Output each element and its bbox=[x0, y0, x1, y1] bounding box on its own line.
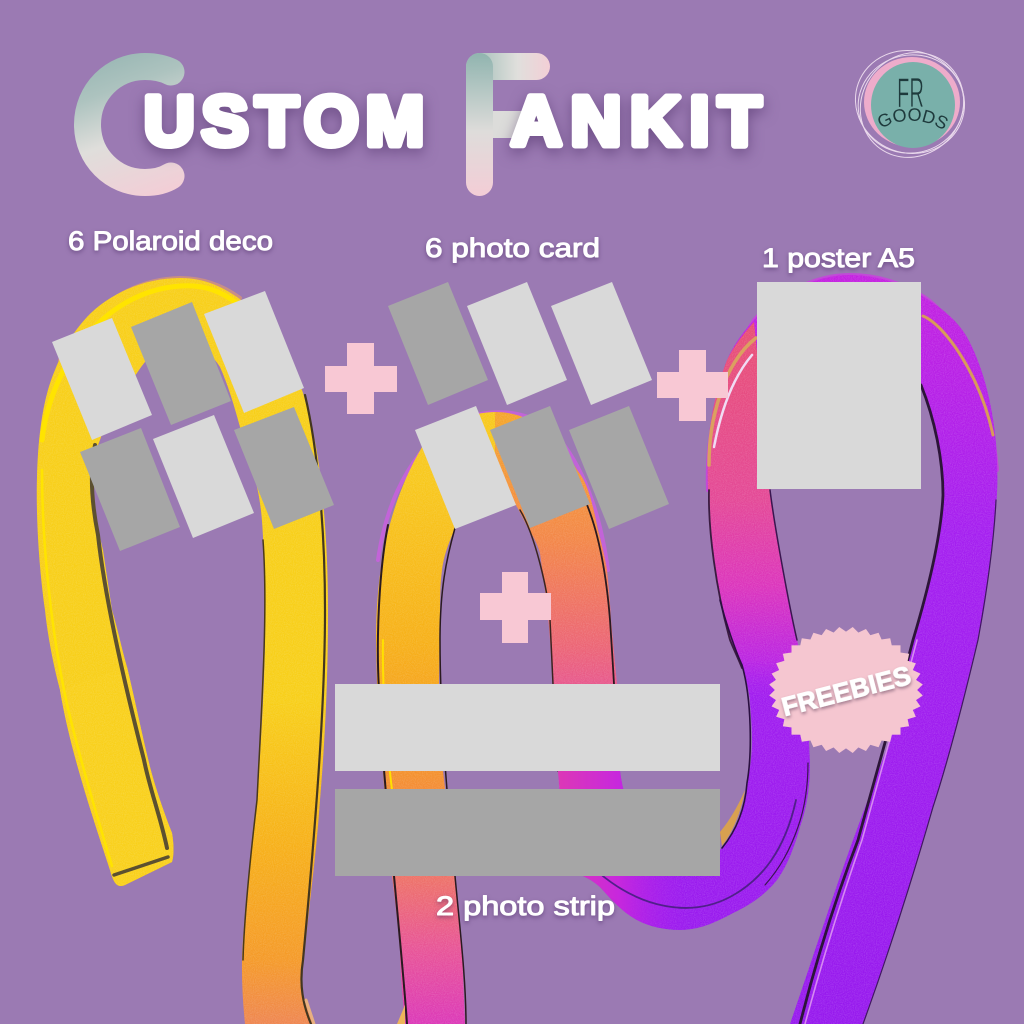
poster A5 placeholder bbox=[757, 282, 921, 489]
purple ribbon, loop and right arch bbox=[558, 275, 997, 1024]
decorative letter F bbox=[466, 53, 550, 196]
title: Custom Fankit bbox=[88, 53, 761, 196]
logo teal circle bbox=[871, 62, 955, 148]
label: 1 poster A5: 1 poster A5 bbox=[762, 243, 915, 273]
plus icon 3 bbox=[480, 572, 551, 643]
logo pink blob bbox=[864, 57, 960, 147]
photo card placeholders bbox=[388, 282, 669, 529]
logo: FR Goods bbox=[854, 50, 965, 158]
logo text GOODS: GOODS bbox=[878, 108, 948, 129]
polaroid deco placeholders bbox=[52, 291, 334, 551]
title text: ANKIT: ANKIT bbox=[511, 82, 761, 160]
label: 2 photo strip: 2 photo strip bbox=[436, 891, 615, 921]
ribbon, middle arch, right half bbox=[495, 412, 625, 800]
logo scribble rings bbox=[839, 31, 985, 179]
badge starburst bbox=[769, 627, 923, 753]
ribbon, middle arch, left half bbox=[376, 412, 608, 1024]
yellow ribbon, left arch bbox=[37, 278, 328, 1024]
freebies badge bbox=[769, 627, 923, 753]
plus icon 1 bbox=[325, 343, 397, 414]
label: 6 photo card: 6 photo card bbox=[425, 233, 600, 263]
title text: USTOM: USTOM bbox=[144, 82, 424, 160]
label: 6 Polaroid deco: 6 Polaroid deco bbox=[68, 226, 273, 256]
plus icon 2 bbox=[657, 350, 728, 421]
photo strip placeholders bbox=[335, 684, 720, 876]
badge text: FREEBIES bbox=[779, 660, 914, 722]
decorative letter C bbox=[88, 66, 171, 182]
logo: FR Goods: FR bbox=[897, 69, 924, 116]
